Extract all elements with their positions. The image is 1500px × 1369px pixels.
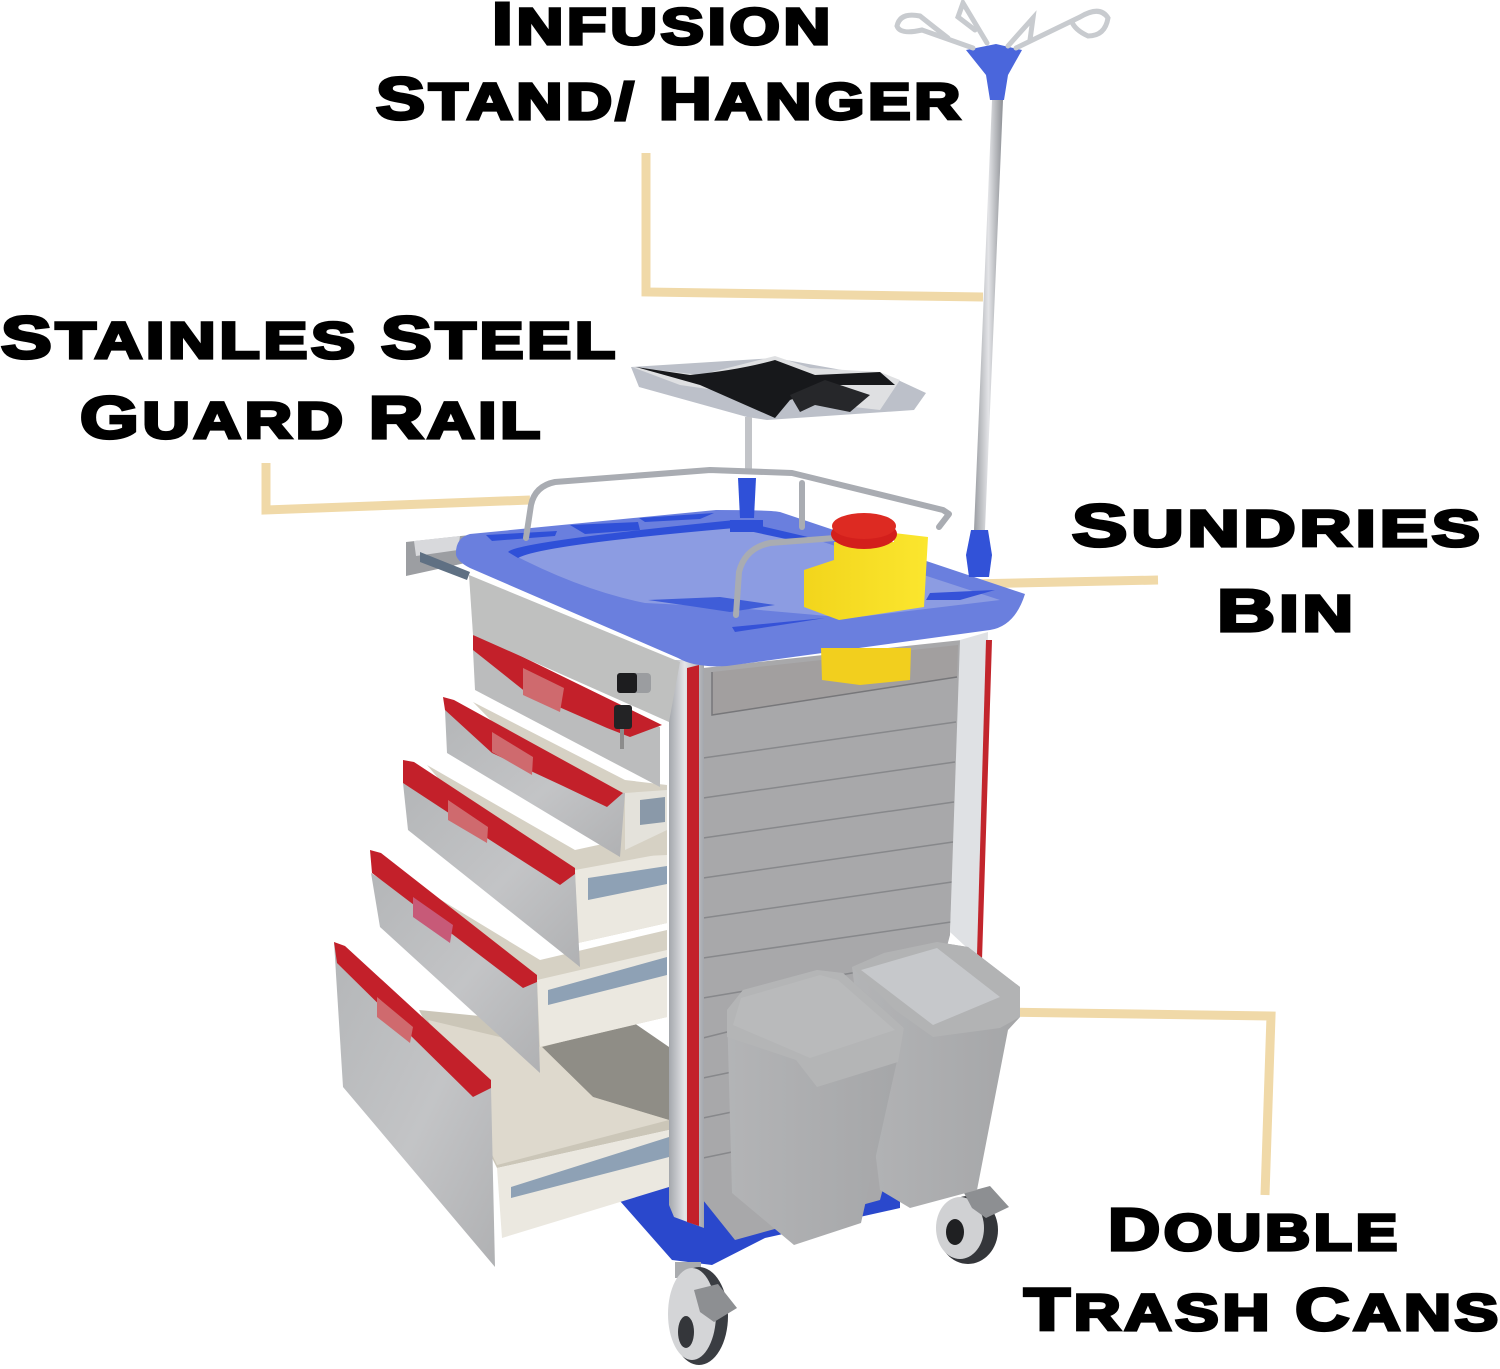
heading: trash cans: DOUBLE [1108, 1197, 1401, 1263]
heading: guard rail [1, 305, 619, 451]
side shelf [406, 535, 470, 580]
heading: guard rail: STAINLES STEEL [1, 305, 619, 371]
heading: trash cans: TRASH CANS [1024, 1277, 1500, 1343]
heading: infusion stand: STAND/ HANGER [376, 66, 964, 132]
connector: sundries bin [920, 580, 1158, 585]
drawer 1 [473, 635, 662, 787]
trash can rear [852, 942, 1020, 1208]
guard rail [526, 470, 949, 615]
connector: guard rail [266, 463, 530, 510]
rear caster [936, 1186, 1009, 1264]
top drawer with lock [469, 575, 680, 749]
heading: sundries bin: S UNDRIES [1072, 493, 1484, 559]
connector: infusion stand [646, 153, 983, 297]
base [620, 1186, 900, 1265]
sharps bin [804, 513, 928, 685]
illustration: medical cart [334, 3, 1108, 1365]
infusion pole [897, 3, 1108, 577]
cabinet side panel [703, 640, 962, 1240]
heading: infusion stand [376, 0, 964, 132]
right post [950, 632, 992, 960]
upper tray [631, 356, 926, 532]
heading: sundries bin [1072, 493, 1484, 644]
heading: trash cans [1024, 1197, 1500, 1343]
drawer 2 [443, 697, 667, 857]
heading: guard rail: G UARD R AIL [80, 385, 544, 451]
front post [669, 660, 704, 1228]
trash can front [727, 970, 904, 1245]
drawer 5 [334, 942, 669, 1267]
heading: sundries bin: B IN [1217, 578, 1357, 644]
front caster [668, 1262, 737, 1365]
connector: trash cans [1000, 1012, 1271, 1195]
top tray [456, 510, 1025, 666]
drawer 4 [370, 850, 667, 1073]
drawer 3 [403, 760, 667, 967]
